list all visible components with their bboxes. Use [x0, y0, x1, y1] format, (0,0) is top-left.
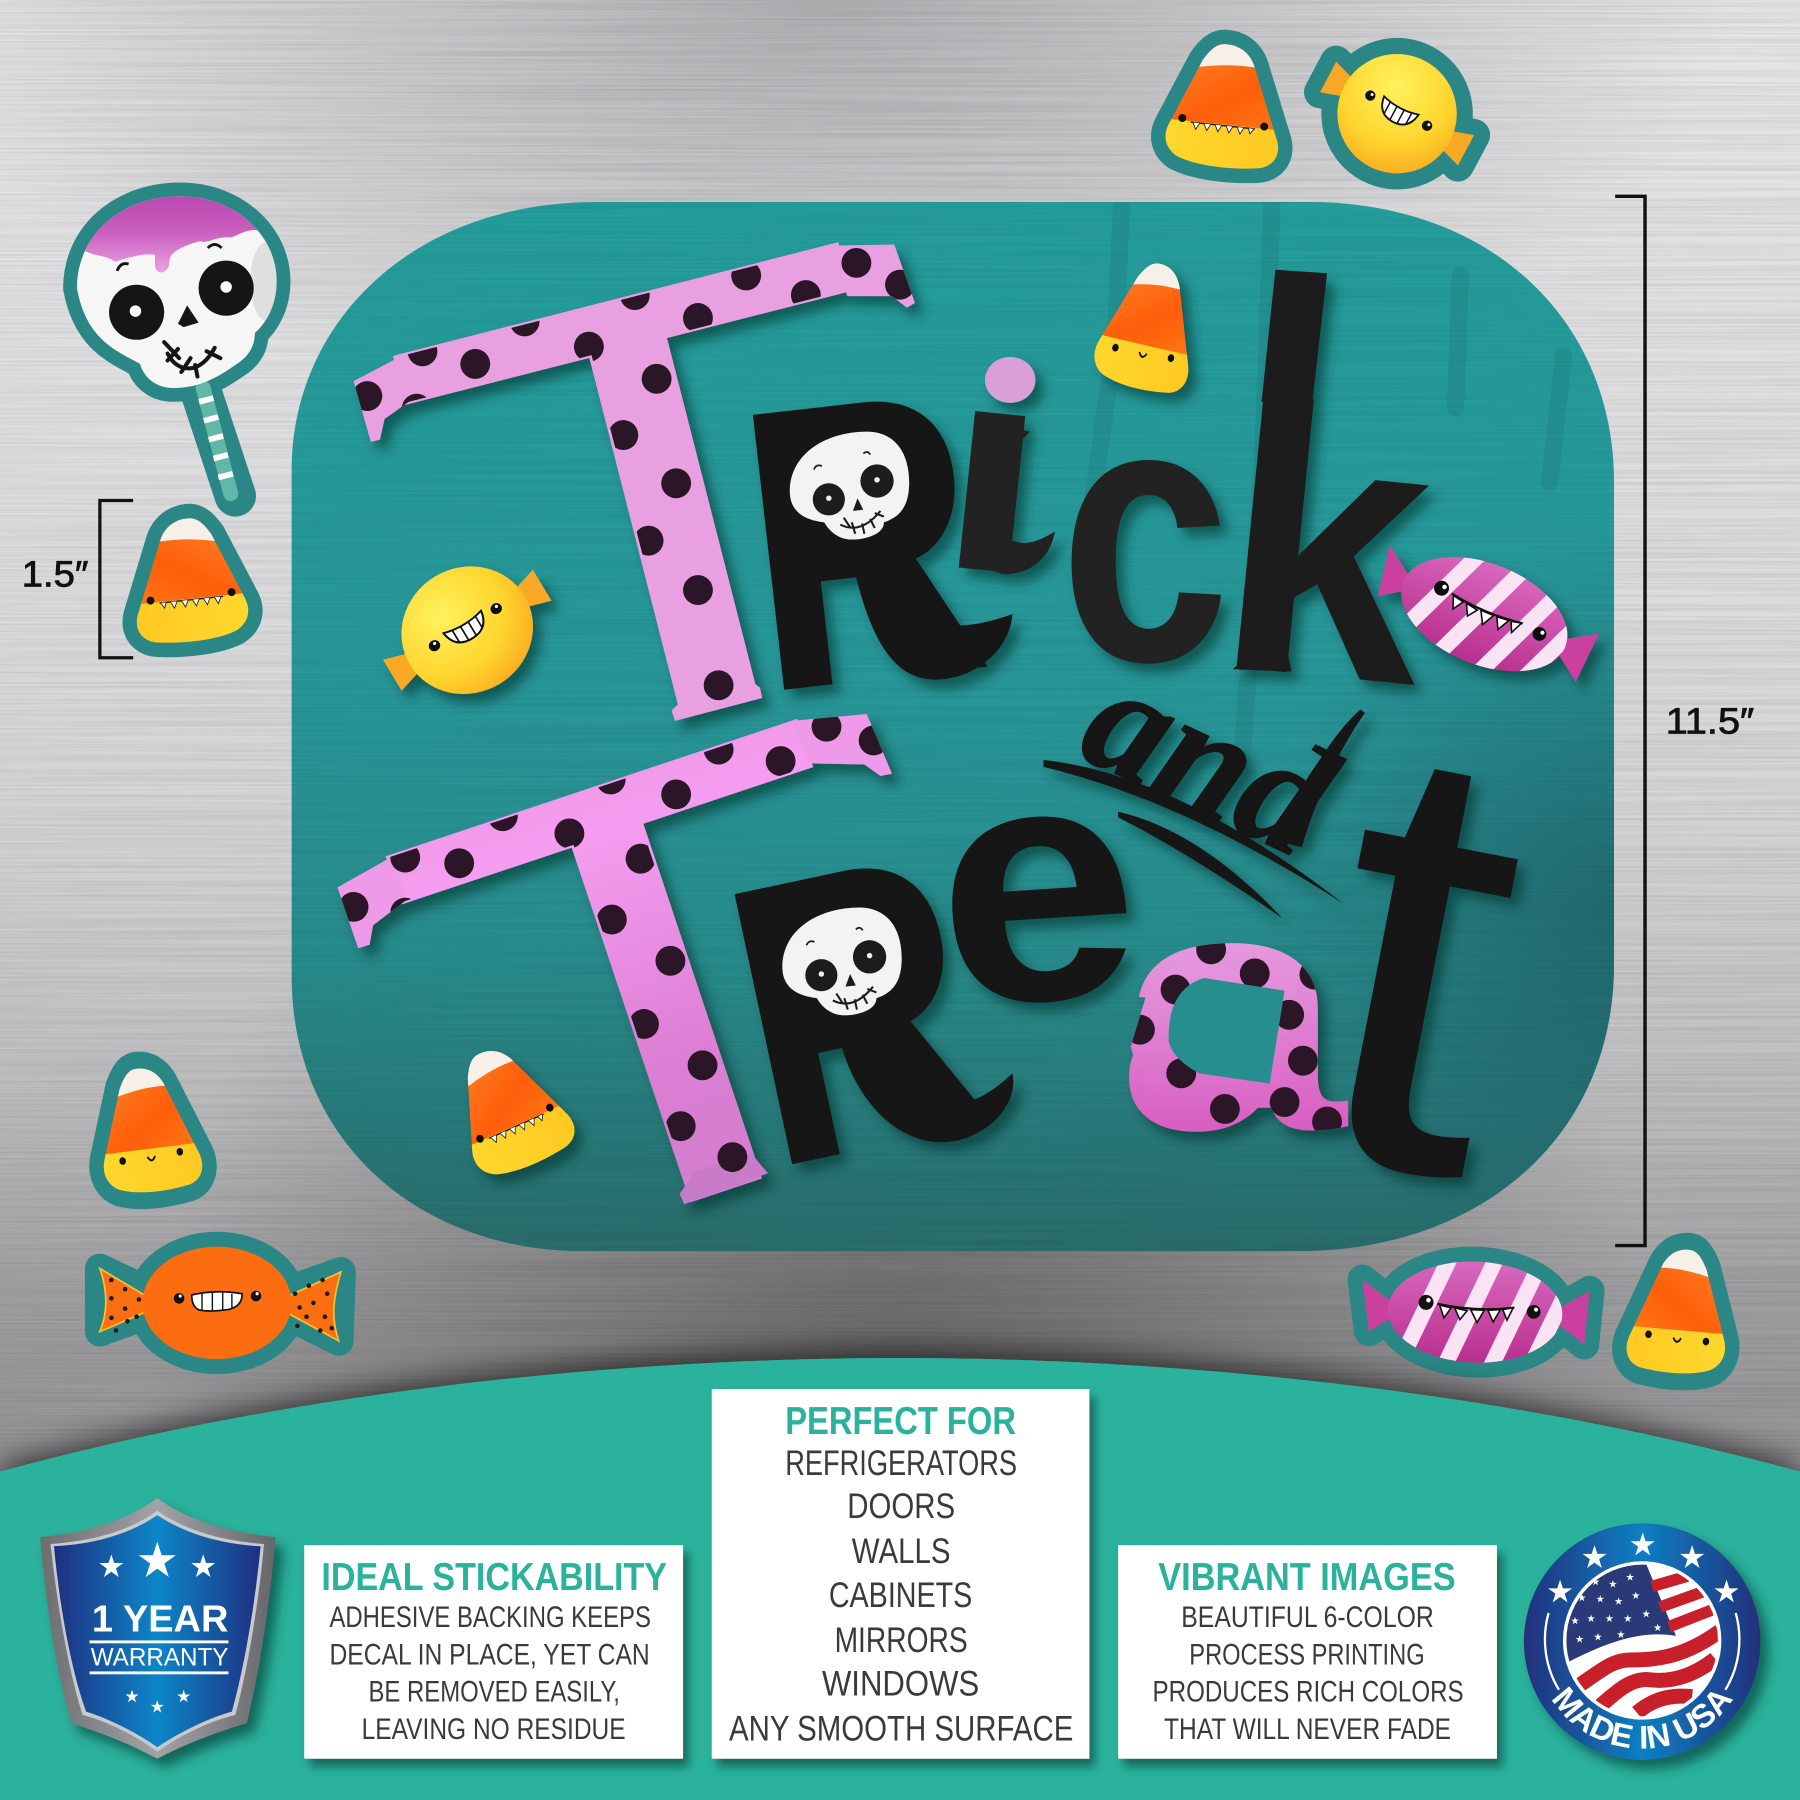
sticker: candy corn top: [1151, 31, 1304, 182]
sticker: candy corn bottom right: [1611, 1237, 1743, 1386]
panel: perfect for: REFRIGERATORS: [785, 1443, 1017, 1483]
panel: ideal stickability: DECAL IN PLACE, YET CAN: [329, 1637, 650, 1671]
panel: perfect for: CABINETS: [829, 1575, 972, 1615]
panel: vibrant images: PRODUCES RICH COLORS: [1153, 1674, 1464, 1708]
letter k of Trick: k: [1203, 326, 1449, 768]
panel: perfect for: ANY SMOOTH SURFACE: [729, 1708, 1073, 1748]
panel: perfect for: MIRRORS: [835, 1620, 968, 1660]
pink striped candy in panel: [1357, 518, 1611, 710]
label: 1.5 inch: 1.5″: [22, 553, 88, 595]
letter i of Trick: i: [926, 298, 1063, 640]
letter t of Treat: t: [1268, 603, 1573, 1313]
panel: vibrant images: THAT WILL NEVER FADE: [1164, 1712, 1451, 1746]
panel: perfect for: WINDOWS: [822, 1663, 979, 1704]
letter T of Treat: [338, 714, 904, 1215]
yellow candy in panel: [360, 531, 574, 729]
bracket: 11.5 inch: [1615, 196, 1645, 1246]
panel: vibrant images: BEAUTIFUL 6-COLOR: [1181, 1600, 1434, 1634]
panel: vibrant images: [1118, 1545, 1497, 1759]
warranty shield: 1 YEAR: [92, 1597, 229, 1639]
panel: vibrant images: VIBRANT IMAGES: [1158, 1555, 1456, 1599]
letter a of Treat, pink with polka dots: a: [1117, 818, 1351, 1204]
panel: perfect for: PERFECT FOR: [785, 1399, 1016, 1443]
panel: ideal stickability: BE REMOVED EASILY,: [368, 1674, 620, 1708]
script word and with swooshes: and: [1060, 626, 1360, 891]
teal footer band: [0, 1358, 1800, 1800]
panel: vibrant images: PROCESS PRINTING: [1189, 1637, 1425, 1671]
sticker: orange candy: [100, 1247, 341, 1359]
sticker: candy corn left: [111, 505, 262, 656]
letter R of Trick with skull: R: [724, 310, 1001, 777]
panel: ideal stickability: IDEAL STICKABILITY: [321, 1555, 667, 1599]
label: 11.5 inch: 11.5″: [1666, 700, 1754, 742]
sticker: skull lollipop: [63, 189, 282, 496]
made in USA badge: MADE IN USA: [1552, 1686, 1734, 1749]
letter T of Trick: T: [347, 115, 991, 896]
made in USA badge: [1524, 1523, 1776, 1777]
panel: ideal stickability: ADHESIVE BACKING KEEPS: [329, 1600, 651, 1634]
panel: perfect for: DOORS: [847, 1486, 955, 1526]
sticker: candy corn bottom left: [82, 1054, 219, 1206]
panel: ideal stickability: LEAVING NO RESIDUE: [362, 1712, 626, 1746]
letter R of Treat with skull: R: [698, 771, 1014, 1251]
panel: perfect for: [712, 1389, 1089, 1759]
panel: ideal stickability: [304, 1545, 683, 1759]
letter a of Treat, pink with polka dots: [1129, 943, 1356, 1148]
sticker: yellow candy top right: [1300, 24, 1494, 203]
bracket: 1.5 inch: [100, 501, 133, 658]
panel: perfect for: WALLS: [852, 1531, 951, 1571]
letter i of Trick: [958, 357, 1068, 590]
candy corn in panel, bottom left: [424, 1019, 598, 1196]
main teal decal panel: [287, 195, 1619, 1257]
warranty shield: WARRANTY: [91, 1643, 229, 1671]
sticker: pink candy: [1360, 1251, 1591, 1373]
letter c of Trick: c: [1060, 325, 1230, 742]
warranty shield: [40, 1498, 276, 1759]
letter e of Treat: e: [924, 688, 1149, 1080]
letter T of Treat: T: [332, 593, 988, 1389]
candy corn in panel, top: [1078, 245, 1225, 409]
letter T of Trick: [354, 242, 928, 736]
